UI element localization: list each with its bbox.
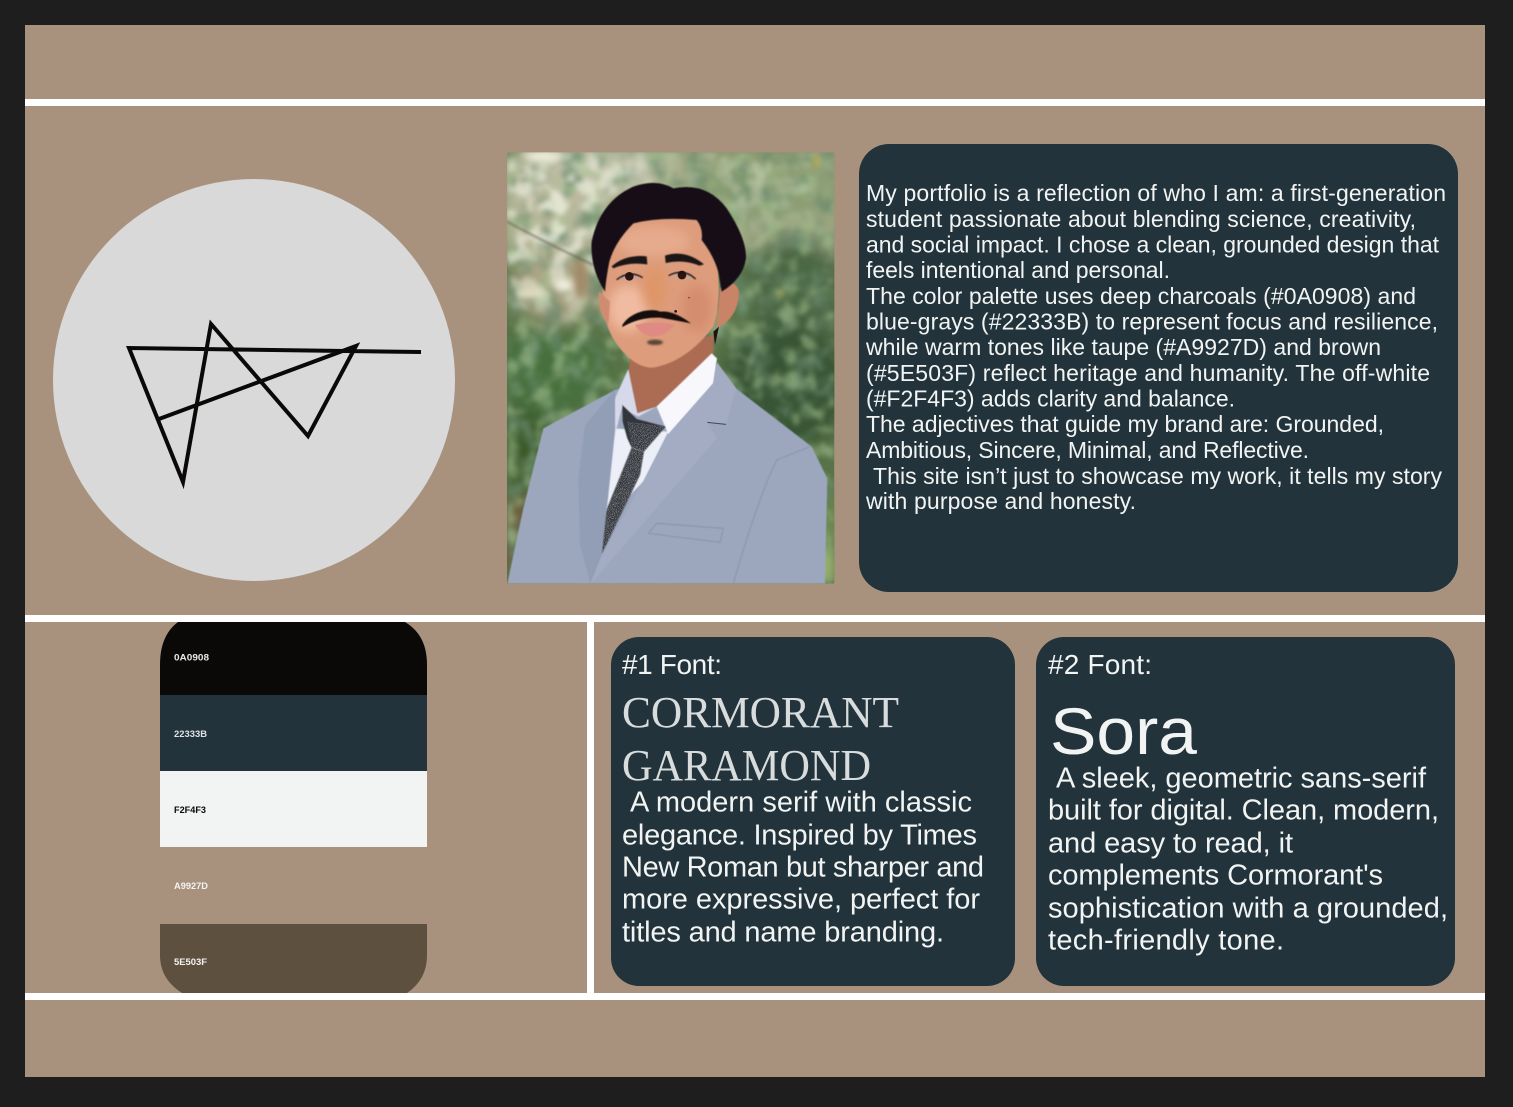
tie xyxy=(622,405,666,452)
eyes xyxy=(619,275,641,280)
font 2 description xyxy=(1048,762,1448,956)
jacket xyxy=(507,362,827,584)
hair xyxy=(591,183,746,292)
font 1 description: more expressive, perfect for xyxy=(622,884,980,916)
font 2 description: sophistication with a grounded, xyxy=(1048,892,1448,924)
font 1 specimen name: CORMORANT xyxy=(622,688,899,737)
font 2 description: tech-friendly tone. xyxy=(1048,924,1284,956)
statement text xyxy=(865,180,1446,514)
font 2 description: A sleek, geometric sans-serif xyxy=(1056,762,1427,794)
font 2 heading: #2 Font: xyxy=(1048,649,1152,680)
statement text: and social impact. I chose a clean, grounded design that xyxy=(866,232,1440,258)
statement text: The adjectives that guide my brand are: Grounded, xyxy=(866,411,1384,437)
font 2 description: and easy to read, it xyxy=(1048,828,1293,860)
panel: portfolio statement xyxy=(859,144,1458,592)
font 1 description: A modern serif with classic xyxy=(630,786,972,818)
font 1 specimen name xyxy=(622,688,899,790)
layout divider lines xyxy=(25,99,1485,1000)
palette hex labels: 0A0908 xyxy=(174,652,210,664)
logo: signature monogram in circle xyxy=(53,179,455,581)
panel: font 2 xyxy=(1036,637,1455,986)
palette hex labels: F2F4F3 xyxy=(174,805,206,816)
statement text: (#5E503F) reflect heritage and humanity. The off-white xyxy=(866,360,1430,386)
color palette xyxy=(160,622,427,993)
moustache, lips and chin xyxy=(622,310,691,327)
neck xyxy=(628,335,713,413)
lapels xyxy=(578,390,615,584)
palette hex labels: 22333B xyxy=(174,729,207,740)
palette hex labels xyxy=(174,652,210,968)
statement text: (#F2F4F3) adds clarity and balance. xyxy=(866,386,1235,412)
statement text: feels intentional and personal. xyxy=(866,257,1170,283)
head xyxy=(603,212,719,368)
shirt xyxy=(606,428,668,511)
statement text: Ambitious, Sincere, Minimal, and Reflective. xyxy=(866,437,1309,463)
font 2 description: built for digital. Clean, modern, xyxy=(1048,794,1439,826)
palette hex labels: 5E503F xyxy=(174,957,207,968)
font 1 heading: #1 Font: xyxy=(622,649,722,680)
panel: font 1 xyxy=(611,637,1015,986)
font 1 description: titles and name branding. xyxy=(622,916,944,948)
statement text: My portfolio is a reflection of who I am: a first-generation xyxy=(866,180,1446,206)
statement text: The color palette uses deep charcoals (#0A0908) and xyxy=(866,283,1416,309)
statement text: student passionate about blending science, creativity, xyxy=(866,206,1416,232)
brows xyxy=(612,256,647,268)
font 1 description: New Roman but sharper and xyxy=(622,852,984,884)
portrait photo xyxy=(493,145,850,584)
statement text: while warm tones like taupe (#A9927D) and brown xyxy=(865,334,1381,360)
font 1 description xyxy=(622,786,984,948)
font 1 specimen name: GARAMOND xyxy=(622,741,871,790)
statement text: This site isn’t just to showcase my work, it tells my story xyxy=(873,463,1442,489)
statement text: with purpose and honesty. xyxy=(865,488,1136,514)
font 2 description: complements Cormorant's xyxy=(1048,860,1383,892)
font 1 description: elegance. Inspired by Times xyxy=(622,820,977,852)
font 2 specimen name: Sora xyxy=(1050,694,1197,768)
palette hex labels: A9927D xyxy=(174,881,208,892)
statement text: blue-grays (#22333B) to represent focus and resilience, xyxy=(866,308,1438,334)
